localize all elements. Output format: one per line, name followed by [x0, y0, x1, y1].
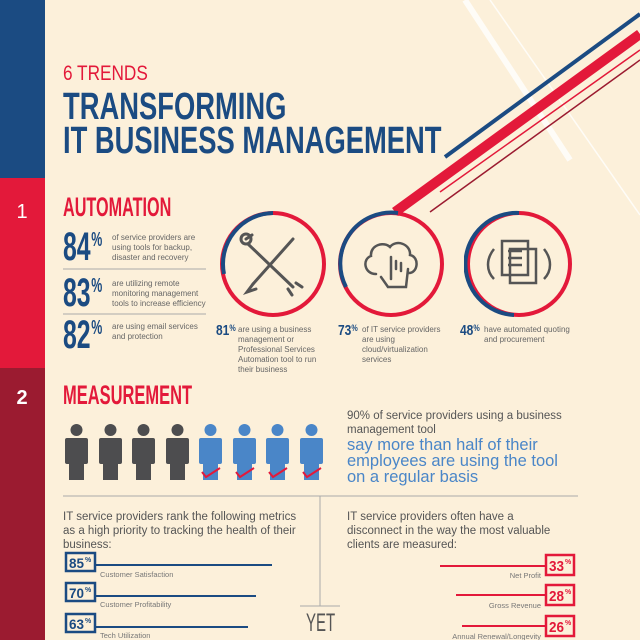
bar chart: client measures: Net Profit	[510, 571, 542, 580]
title	[63, 62, 442, 162]
heading: measurement: MEASUREMENT	[63, 380, 192, 410]
bar chart: client measures: 26	[549, 619, 564, 636]
stat 81: are using a business management or Professional Services Automation tool to run their business	[238, 325, 316, 374]
heading: automation: AUTOMATION	[63, 192, 171, 222]
callout: 90%: say more than half of their employees are using the tool on a regular basis	[347, 436, 558, 486]
stat 82	[63, 313, 198, 357]
people icons	[65, 424, 323, 480]
left color band: 2	[16, 387, 28, 409]
stat 73: 73%	[338, 322, 358, 339]
bar chart: client measures: %	[565, 620, 572, 627]
stat 48	[460, 322, 570, 344]
icon: tools circle	[220, 211, 326, 317]
bar chart: priorities: Customer Satisfaction	[100, 570, 173, 579]
title: 6 TRENDS	[63, 62, 148, 85]
stat 48: 48%	[460, 322, 480, 339]
text: disconnect intro: IT service providers often have a disconnect in the way the most valuable clients are measured:	[347, 511, 550, 551]
YET label: YET	[306, 609, 335, 637]
bar chart: priorities: %	[85, 618, 92, 625]
bar chart: priorities: Customer Profitability	[100, 600, 172, 609]
stat 81: 81%	[216, 322, 236, 339]
bar chart: priorities: 70	[69, 585, 84, 601]
bar chart: client measures	[440, 554, 576, 640]
bar chart: priorities: Tech Utilization	[100, 631, 150, 640]
bar chart: priorities	[64, 552, 272, 640]
bar chart: client measures: Gross Revenue	[489, 601, 541, 610]
stat 83	[63, 271, 206, 315]
stat 82: 82%	[63, 313, 102, 357]
stat 48: have automated quoting and procurement	[484, 325, 570, 344]
stat 84	[63, 225, 195, 269]
bar chart: priorities: %	[85, 557, 92, 564]
bar chart: client measures: %	[565, 559, 572, 566]
stat 83: 83%	[63, 271, 102, 315]
callout: 90%: 90% of service providers using a business management tool	[347, 410, 562, 436]
callout: 90%	[347, 410, 562, 486]
stat 84: of service providers are using tools for backup, disaster and recovery	[112, 233, 195, 262]
text: metrics intro: IT service providers rank the following metrics as a high priority to tracking the health of their business:	[63, 511, 296, 551]
stat 83: are utilizing remote monitoring management tools to increase efficiency	[112, 279, 206, 308]
left color band: 1	[16, 201, 28, 223]
title: IT BUSINESS MANAGEMENT	[63, 120, 442, 162]
icon: documents circle	[464, 210, 572, 317]
bar chart: client measures: %	[565, 589, 572, 596]
bar chart: priorities: %	[85, 587, 92, 594]
stat 73: of IT service providers are using cloud/virtualization services	[362, 325, 441, 364]
bar chart: priorities: 63	[69, 616, 84, 632]
bar chart: client measures: 28	[549, 588, 564, 605]
stat 82: are using email services and protection	[112, 322, 198, 341]
bar chart: client measures: 33	[549, 558, 564, 575]
icon: cloud hand circle	[338, 210, 444, 317]
stat 84: 84%	[63, 225, 102, 269]
title: TRANSFORMING	[63, 86, 286, 128]
bar chart: priorities: 85	[69, 555, 84, 571]
